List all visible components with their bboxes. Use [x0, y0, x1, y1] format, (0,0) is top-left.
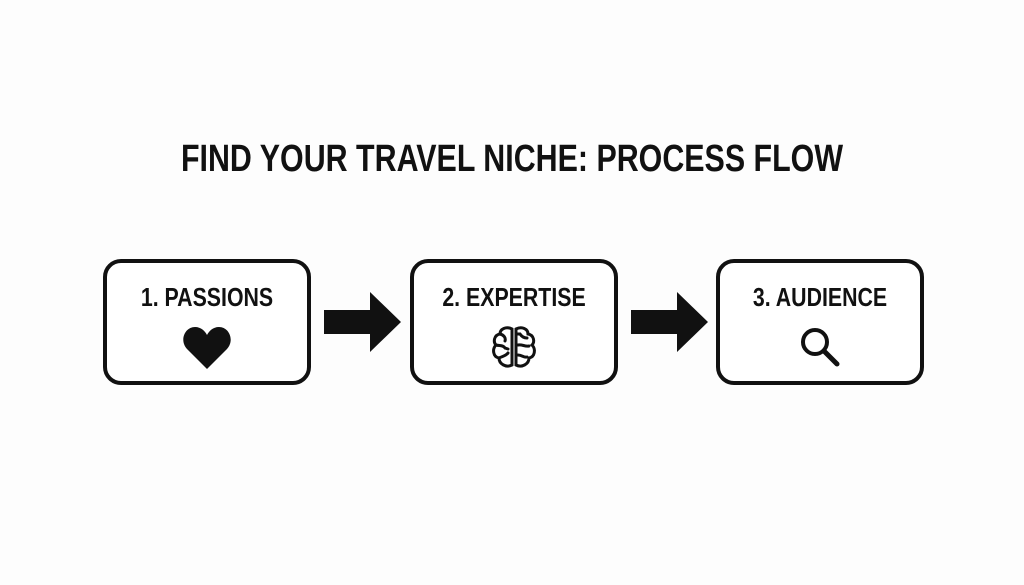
label: audience: 3. AUDIENCE	[753, 282, 887, 312]
arrow 2	[631, 292, 708, 352]
panel: passions	[103, 259, 311, 385]
panel: expertise	[410, 259, 618, 385]
icon: brain	[492, 326, 536, 368]
arrow 1	[324, 292, 401, 352]
icon: heart	[183, 327, 231, 369]
label: expertise: 2. EXPERTISE	[442, 282, 586, 312]
title: FIND YOUR TRAVEL NICHE: PROCESS FLOW	[181, 138, 843, 180]
icon: magnifier	[801, 328, 840, 366]
label: passions: 1. PASSIONS	[141, 282, 273, 312]
panel: audience	[716, 259, 924, 385]
